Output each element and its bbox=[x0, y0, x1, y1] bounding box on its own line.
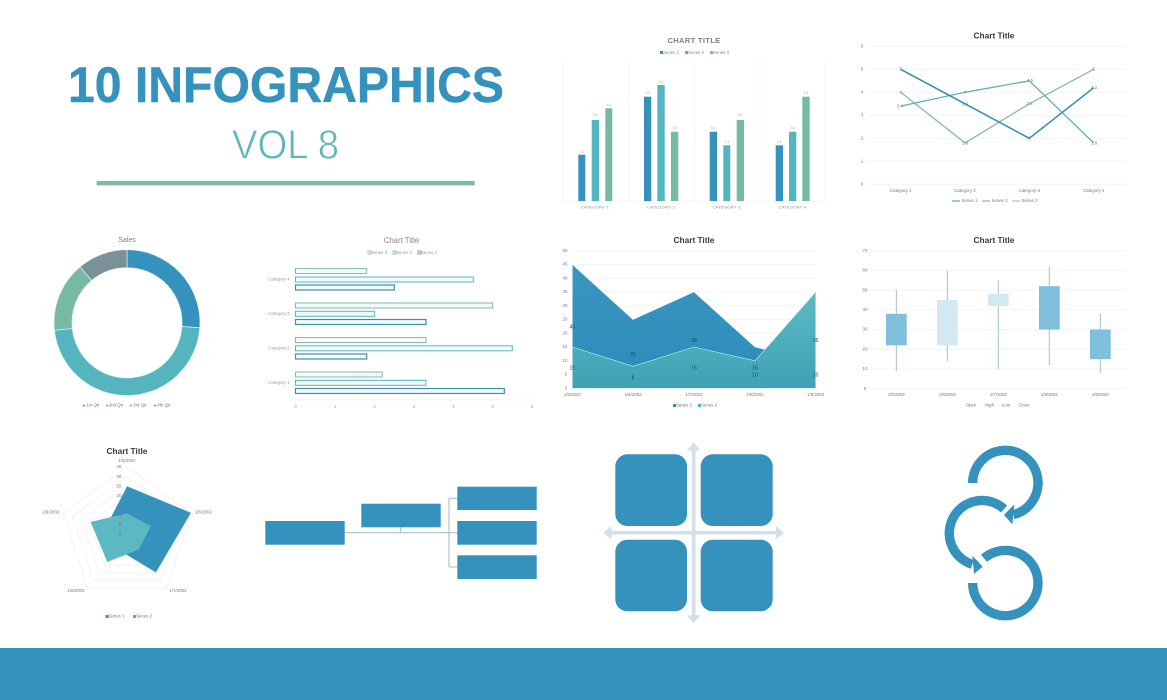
area x axis labels: 1/9/2002 bbox=[807, 392, 825, 397]
donut legend: 2nd Qtr bbox=[109, 403, 124, 408]
radar title: Chart Title bbox=[107, 446, 148, 456]
panel: outlined horizontal bar chart bbox=[268, 236, 534, 409]
flow box right bottom bbox=[457, 555, 537, 579]
column bars bbox=[578, 85, 810, 201]
panel: radar chart bbox=[42, 446, 212, 619]
circular arrow bottom bbox=[973, 550, 1038, 616]
radar scale labels: 15 bbox=[118, 502, 123, 507]
flow box right top bbox=[457, 487, 537, 510]
candlestick y axis labels: 60 bbox=[863, 268, 868, 273]
horizontal bars bbox=[296, 268, 512, 394]
column value labels: 3.5 bbox=[593, 113, 597, 117]
line value labels: 4.5 bbox=[1027, 78, 1034, 83]
column value labels: 3.0 bbox=[791, 126, 795, 130]
bar chart axis labels: Category 1 bbox=[268, 380, 290, 385]
area y axis labels: 5 bbox=[565, 372, 568, 377]
radar legend: Series 2 bbox=[136, 614, 153, 619]
area x axis labels: 1/6/2002 bbox=[624, 392, 642, 397]
radar legend: Series 1 bbox=[108, 614, 125, 619]
column value labels: 2.0 bbox=[580, 150, 584, 154]
line chart axis labels: Category 2 bbox=[954, 188, 976, 193]
candlestick legend: Open bbox=[966, 403, 977, 408]
line chart axis labels: Category 1 bbox=[890, 188, 912, 193]
radar axis labels: 1/6/2002 bbox=[195, 509, 212, 514]
radar series 1 bbox=[106, 486, 191, 573]
donut ring bbox=[54, 250, 200, 396]
flow box middle bbox=[361, 504, 441, 527]
bar chart axis labels: 2 bbox=[373, 404, 376, 409]
line series 3 bbox=[901, 69, 1094, 143]
bar chart legend bbox=[368, 250, 438, 255]
candlestick x axis labels: 1/8/2002 bbox=[1041, 392, 1058, 397]
bar chart axis labels: Category 2 bbox=[268, 346, 290, 350]
candlestick legend: Low bbox=[1002, 403, 1011, 408]
radar series 2 bbox=[91, 513, 151, 562]
column value labels: 4.5 bbox=[646, 91, 650, 95]
candlestick x axis labels: 1/6/2002 bbox=[939, 392, 956, 397]
candlestick legend: Close bbox=[1018, 403, 1030, 408]
area y axis labels: 30 bbox=[563, 303, 568, 308]
area x axis labels: 1/5/2002 bbox=[564, 392, 581, 397]
line chart axis labels: Category 3 bbox=[1019, 188, 1041, 193]
line value labels: 5 bbox=[899, 66, 902, 71]
candlestick title: Chart Title bbox=[974, 235, 1015, 245]
area y axis labels: 25 bbox=[563, 317, 568, 322]
panel: flow diagram bbox=[265, 487, 537, 579]
line value labels: 5 bbox=[1092, 67, 1095, 72]
line value labels: 1.8 bbox=[1091, 141, 1098, 146]
matrix box top left bbox=[615, 454, 687, 526]
radar scale labels: 5 bbox=[119, 522, 122, 527]
area y axis labels: 40 bbox=[563, 275, 568, 280]
area value labels: 35 bbox=[813, 338, 819, 344]
bar chart title: Chart Title bbox=[384, 236, 419, 245]
line series 1 bbox=[901, 69, 1094, 138]
line chart axis labels: Category 4 bbox=[1083, 188, 1105, 193]
bar chart axis labels: 5 bbox=[491, 404, 494, 409]
candlestick x axis labels bbox=[888, 392, 1109, 397]
bar chart axis labels: 1 bbox=[334, 404, 337, 409]
donut legend: 1st Qtr bbox=[86, 403, 100, 408]
line chart axis labels: 4 bbox=[861, 89, 864, 94]
radar axis labels: 1/8/2002 bbox=[67, 588, 85, 593]
column category labels bbox=[581, 204, 807, 210]
bar chart axis labels: Category 4 bbox=[268, 276, 290, 282]
area series 2 bbox=[572, 292, 816, 388]
candlestick wicks bbox=[896, 266, 1100, 373]
candlestick boxes bbox=[886, 286, 1111, 359]
title block bbox=[68, 56, 504, 185]
flow box right middle bbox=[457, 521, 537, 545]
panel: circular arrows bbox=[949, 450, 1038, 616]
area y axis labels: 10 bbox=[563, 358, 568, 363]
bar chart axis labels: 3 bbox=[413, 404, 416, 409]
area x axis labels: 1/8/2002 bbox=[746, 392, 764, 397]
area legend: Series 2 bbox=[701, 403, 718, 408]
column value labels: 2.4 bbox=[777, 140, 781, 144]
bar chart axis labels: 6 bbox=[531, 404, 534, 409]
line chart legend: Series 3 bbox=[1021, 198, 1038, 203]
area x axis labels: 1/7/2002 bbox=[685, 392, 703, 397]
area chart title: Chart Title bbox=[674, 235, 715, 245]
panel: candlestick chart bbox=[863, 235, 1127, 408]
area y axis labels: 45 bbox=[563, 262, 568, 267]
line value labels: 1.8 bbox=[962, 141, 969, 146]
radar axis labels: 1/5/2002 bbox=[118, 458, 136, 463]
area y axis labels: 0 bbox=[565, 385, 568, 390]
line value labels: 3.5 bbox=[1026, 101, 1033, 106]
area legend: Series 1 bbox=[676, 403, 693, 408]
line chart legend: Series 1 bbox=[961, 198, 978, 203]
column category labels: CATEGORY 1 bbox=[581, 204, 610, 210]
column value labels: 3.5 bbox=[738, 113, 742, 117]
radar axis labels: 1/7/2002 bbox=[169, 588, 187, 593]
area value labels: 45 bbox=[570, 324, 575, 330]
circular arrow top bbox=[973, 450, 1038, 524]
radar legend bbox=[106, 614, 153, 619]
flow box left bbox=[265, 521, 345, 545]
line value labels: 4 bbox=[899, 90, 902, 95]
area value labels: 15 bbox=[570, 366, 575, 372]
line chart axis labels: 5 bbox=[861, 66, 864, 71]
radar scale labels: 10 bbox=[118, 512, 123, 517]
bar chart legend: Series 3 bbox=[371, 250, 388, 255]
radar scale labels: 0 bbox=[119, 531, 122, 536]
area value labels: 8 bbox=[632, 375, 635, 381]
column chart legend: Series 3 bbox=[713, 50, 730, 55]
panel: line chart bbox=[861, 30, 1127, 203]
area value labels: 10 bbox=[813, 372, 819, 378]
line chart axis labels: 2 bbox=[861, 135, 864, 140]
matrix box bottom right bbox=[701, 540, 773, 611]
bar chart axis labels bbox=[268, 276, 534, 409]
line chart title: Chart Title bbox=[974, 30, 1015, 40]
column chart legend: Series 1 bbox=[663, 50, 680, 55]
candlestick y axis labels: 30 bbox=[863, 327, 868, 332]
line value labels: 4.2 bbox=[1091, 85, 1098, 90]
area y axis labels: 15 bbox=[563, 344, 568, 349]
column value labels: 2.4 bbox=[725, 140, 729, 144]
candlestick y axis labels: 10 bbox=[863, 366, 868, 371]
column chart legend bbox=[660, 50, 730, 55]
line value labels bbox=[897, 66, 1098, 146]
column category labels: CATEGORY 4 bbox=[778, 204, 807, 210]
radar scale labels: 25 bbox=[117, 483, 122, 488]
area value labels: 10 bbox=[752, 372, 758, 378]
column value labels: 4.5 bbox=[804, 91, 808, 95]
subtitle: vol 8: VOL 8 bbox=[232, 122, 339, 168]
line chart axis labels: 6 bbox=[861, 43, 864, 48]
panel: donut chart bbox=[54, 237, 200, 408]
bar chart axis labels: 0 bbox=[294, 404, 297, 409]
panel: four quadrant matrix bbox=[603, 442, 784, 623]
radar scale labels: 20 bbox=[117, 493, 122, 498]
radar scale labels: 30 bbox=[117, 474, 122, 479]
flow connectors bbox=[345, 498, 457, 567]
bar chart legend: Series 1 bbox=[421, 250, 438, 255]
area y axis labels bbox=[563, 248, 568, 390]
candlestick y axis labels: 50 bbox=[863, 287, 868, 292]
column value labels: 4.0 bbox=[607, 103, 611, 107]
panel: clustered column chart bbox=[563, 36, 825, 210]
line value labels: 3.4 bbox=[897, 104, 904, 109]
line value labels: 2 bbox=[1028, 136, 1031, 141]
area y axis labels: 50 bbox=[563, 248, 568, 253]
radar axis labels bbox=[42, 458, 212, 593]
line value labels: 3.5 bbox=[962, 101, 969, 106]
matrix box bottom left bbox=[615, 540, 687, 611]
candlestick x axis labels: 1/9/2002 bbox=[1092, 392, 1109, 397]
column value labels: 5.0 bbox=[659, 80, 663, 84]
circular arrow middle bbox=[949, 500, 1004, 574]
area value labels: 35 bbox=[691, 338, 697, 344]
title: 10 infographics: 10 INFOGRAPHICS bbox=[68, 56, 504, 113]
area series 1 bbox=[572, 264, 767, 388]
area y axis labels: 20 bbox=[563, 330, 568, 335]
candlestick y axis labels: 20 bbox=[863, 346, 868, 351]
column chart title: CHART TITLE bbox=[667, 36, 721, 45]
column value labels bbox=[580, 80, 808, 154]
line chart legend bbox=[952, 198, 1038, 203]
column category labels: CATEGORY 2 bbox=[647, 204, 676, 210]
candlestick y axis labels: 70 bbox=[863, 248, 868, 253]
line series 2 bbox=[901, 81, 1094, 143]
area legend bbox=[673, 403, 718, 408]
column value labels: 3.0 bbox=[711, 126, 715, 130]
line chart axis labels: 1 bbox=[861, 158, 864, 163]
line chart axis labels: 0 bbox=[861, 181, 864, 186]
line chart axis labels bbox=[861, 43, 1105, 193]
line chart legend: Series 2 bbox=[991, 198, 1008, 203]
matrix cross arrows bbox=[603, 442, 784, 623]
donut legend: 3rd Qtr bbox=[133, 403, 147, 408]
panel: area chart bbox=[563, 235, 825, 408]
candlestick legend bbox=[966, 403, 1030, 408]
area x axis labels bbox=[564, 392, 825, 397]
candlestick y axis labels bbox=[863, 248, 868, 391]
area value labels bbox=[570, 324, 819, 381]
matrix box top right bbox=[701, 454, 773, 526]
candlestick legend: High bbox=[985, 403, 995, 408]
area value labels: 25 bbox=[630, 352, 636, 358]
column value labels: 3.0 bbox=[673, 126, 677, 130]
donut legend: 4th Qtr bbox=[157, 403, 171, 408]
title underline bbox=[97, 181, 475, 185]
candlestick y axis labels: 0 bbox=[864, 386, 867, 391]
bar chart axis labels: 4 bbox=[452, 404, 455, 409]
footer band bbox=[0, 648, 1167, 700]
radar scale labels: 35 bbox=[117, 464, 122, 469]
candlestick y axis labels: 40 bbox=[863, 307, 868, 312]
donut legend bbox=[83, 403, 171, 408]
donut title: Sales bbox=[118, 237, 136, 244]
radar grid bbox=[63, 467, 191, 588]
bar chart legend: Series 2 bbox=[396, 250, 413, 255]
radar scale labels bbox=[117, 464, 123, 536]
area y axis labels: 35 bbox=[563, 289, 568, 294]
column category labels: CATEGORY 3 bbox=[712, 204, 741, 210]
line value labels: 4 bbox=[964, 90, 967, 95]
bar chart axis labels: Category 3 bbox=[268, 311, 290, 316]
candlestick x axis labels: 1/5/2002 bbox=[888, 392, 905, 397]
area value labels: 15 bbox=[752, 366, 758, 372]
area value labels: 15 bbox=[691, 366, 697, 372]
line chart axis labels: 3 bbox=[861, 112, 864, 117]
radar axis labels: 1/9/2002 bbox=[42, 509, 60, 514]
candlestick x axis labels: 1/7/2002 bbox=[990, 392, 1007, 397]
column chart legend: Series 2 bbox=[688, 50, 705, 55]
